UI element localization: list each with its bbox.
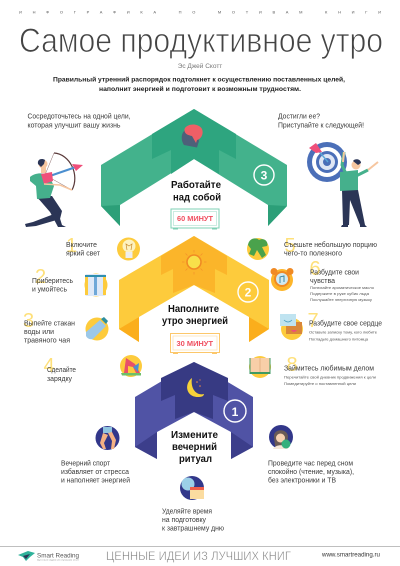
step 2: get ready and wash: и умойтесь (32, 286, 67, 294)
heading: work on yourself (171, 179, 221, 204)
step 3: drink a glass of water: 3 (23, 310, 34, 332)
heading: change evening ritual: вечерний (172, 441, 217, 453)
step 8: do what you love (284, 354, 376, 386)
text: evening sport: Вечерний спорт (61, 460, 111, 468)
intro text: наполнит энергией и подготовит к возможным трудностям. (99, 85, 301, 93)
step 5: eat something healthy: чего-то полезного (284, 250, 342, 258)
author: Эс Джей Скотт (178, 62, 222, 70)
heading: fill the morning with energy: Наполните (168, 303, 219, 315)
time badge: 30 minutes (170, 334, 220, 354)
number 3: 3 (261, 168, 268, 182)
icon: globe and calendar (180, 476, 204, 500)
icon: light bulb (117, 238, 140, 260)
icon: water bottle (86, 317, 108, 340)
icon: yoga (120, 355, 142, 377)
logo: Smart Reading: Smart Reading (37, 552, 79, 560)
text: focus on one goal: которая улучшит вашу жизнь (28, 122, 121, 130)
step 1: turn on bright light (66, 235, 101, 258)
icon: moon (187, 378, 204, 397)
step 2: get ready and wash: Приберитесь (32, 277, 73, 285)
time badge: 60 minutes: 60 МИНУТ (177, 214, 213, 223)
text: reached it: Приступайте к следующей! (278, 122, 364, 130)
text: focus on one goal (28, 112, 131, 130)
step 7: wake up your heart: Разбудите свое сердце (309, 320, 382, 328)
icon: brain and head (182, 124, 203, 148)
text: quiet hour before sleep: спокойно (чтение, музыка), (268, 468, 354, 476)
step 7: wake up your heart: 7 (308, 310, 319, 332)
step 7: wake up your heart: Погладьте домашнего питомца (309, 338, 368, 342)
step 6: wake up your senses (310, 258, 374, 302)
number 1: 1 (232, 405, 239, 419)
step 8: do what you love: Перечитайте свой дневник продвижения к цели (284, 376, 376, 380)
step 6: wake up your senses: Подержите в руке кубик льда (310, 292, 369, 296)
step 3: drink a glass of water: травяного чая (24, 338, 70, 344)
heading: work on yourself: Работайте (171, 179, 221, 191)
heading: change evening ritual: Измените (171, 429, 218, 441)
time badge: 30 minutes: 30 МИНУТ (176, 339, 213, 348)
header label: ИНФОГРАФИКА ПО МОТИВАМ КНИГИ (19, 10, 381, 14)
step 5: eat something healthy (284, 235, 377, 258)
step 3: drink a glass of water: воды или (24, 329, 54, 336)
time badge: 60 minutes (171, 209, 219, 230)
step 8: do what you love: Помедитируйте о поставленной цели (284, 382, 356, 386)
step 6: wake up your senses: чувства (310, 278, 335, 285)
step 8: do what you love: 8 (286, 354, 298, 376)
heading: change evening ritual (171, 429, 218, 465)
heading: change evening ritual: ритуал (179, 453, 212, 465)
panel: yellow chevron step 2 (119, 236, 269, 342)
step 4: do exercises: Сделайте (47, 366, 76, 374)
text: focus on one goal: Сосредоточьтесь на одной цели, (28, 112, 131, 120)
number 2: 2 (245, 286, 252, 300)
number 2 (238, 282, 258, 302)
step 5: eat something healthy: 5 (284, 235, 296, 257)
footer slogan: ЦЕННЫЕ ИДЕИ ИЗ ЛУЧШИХ КНИГ (106, 551, 292, 563)
icon: calm woman (269, 425, 293, 449)
intro text: Правильный утренний распорядок подтолкнет к осуществлению поставленных целей, (53, 76, 345, 84)
text: quiet hour before sleep (268, 460, 354, 484)
logo: Smart Reading (18, 551, 79, 562)
heading: fill the morning with energy: утро энергией (162, 315, 228, 327)
step 1: turn on bright light: яркий свет (66, 250, 101, 258)
heading: work on yourself: над собой (173, 192, 221, 204)
text: prepare for tomorrow (162, 508, 224, 532)
step 6: wake up your senses: 6 (310, 258, 321, 280)
panel: purple chevron step 1 (135, 362, 253, 459)
icon: broccoli (247, 238, 269, 260)
icon: sun (182, 250, 206, 274)
step 6: wake up your senses: Понюхайте ароматическое масло (310, 286, 374, 290)
step 3: drink a glass of water: Выпейте стакан (24, 320, 75, 328)
step 6: wake up your senses: Разбудите свои (310, 268, 359, 276)
intro text (53, 76, 345, 93)
step 7: wake up your heart: Оставьте записку тому, кого любите (309, 330, 377, 334)
heading: fill the morning with energy (162, 303, 228, 327)
step 7: wake up your heart (308, 310, 382, 342)
step 5: eat something healthy: Съешьте небольшую порцию (284, 241, 377, 249)
logo: Smart Reading: Ценные идеи из лучших книг (37, 560, 79, 562)
icon: shower curtain (84, 274, 108, 296)
step 8: do what you love: Займитесь любимым делом (284, 364, 374, 372)
number 3 (254, 165, 274, 185)
icon: alarm clock with music (270, 268, 294, 291)
step 1: turn on bright light: Включите (66, 242, 97, 249)
step 3: drink a glass of water (23, 310, 75, 344)
text: quiet hour before sleep: без электроники и ТВ (268, 476, 336, 484)
step 4: do exercises: 4 (44, 355, 55, 377)
text: reached it: Достигли ее? (278, 114, 320, 120)
step 6: wake up your senses: Послушайте энергичную музыку (310, 298, 372, 302)
text: reached it (278, 114, 364, 130)
text: prepare for tomorrow: к завтрашнему дню (162, 526, 224, 532)
panel: green chevron step 3 (101, 109, 287, 226)
footer url: www.smartreading.ru (321, 552, 380, 558)
text: quiet hour before sleep: Проведите час перед сном (268, 460, 353, 468)
step 4: do exercises (44, 355, 76, 383)
step 4: do exercises: зарядку (47, 376, 72, 383)
icon: note and heart (280, 314, 303, 340)
text: evening sport: избавляет от стресса (61, 468, 129, 476)
step 1: turn on bright light: 1 (66, 235, 77, 257)
text: prepare for tomorrow: Уделяйте время (162, 508, 212, 516)
step 2: get ready and wash (32, 266, 73, 294)
illustration: archer (25, 153, 83, 227)
icon: runner legs (96, 426, 120, 450)
icon: open book (249, 356, 271, 378)
text: evening sport: и наполняет энергией (61, 476, 130, 484)
step 2: get ready and wash: 2 (35, 266, 46, 288)
text: prepare for tomorrow: на подготовку (162, 517, 206, 524)
illustration: target and person (307, 142, 378, 227)
text: evening sport (61, 460, 130, 484)
